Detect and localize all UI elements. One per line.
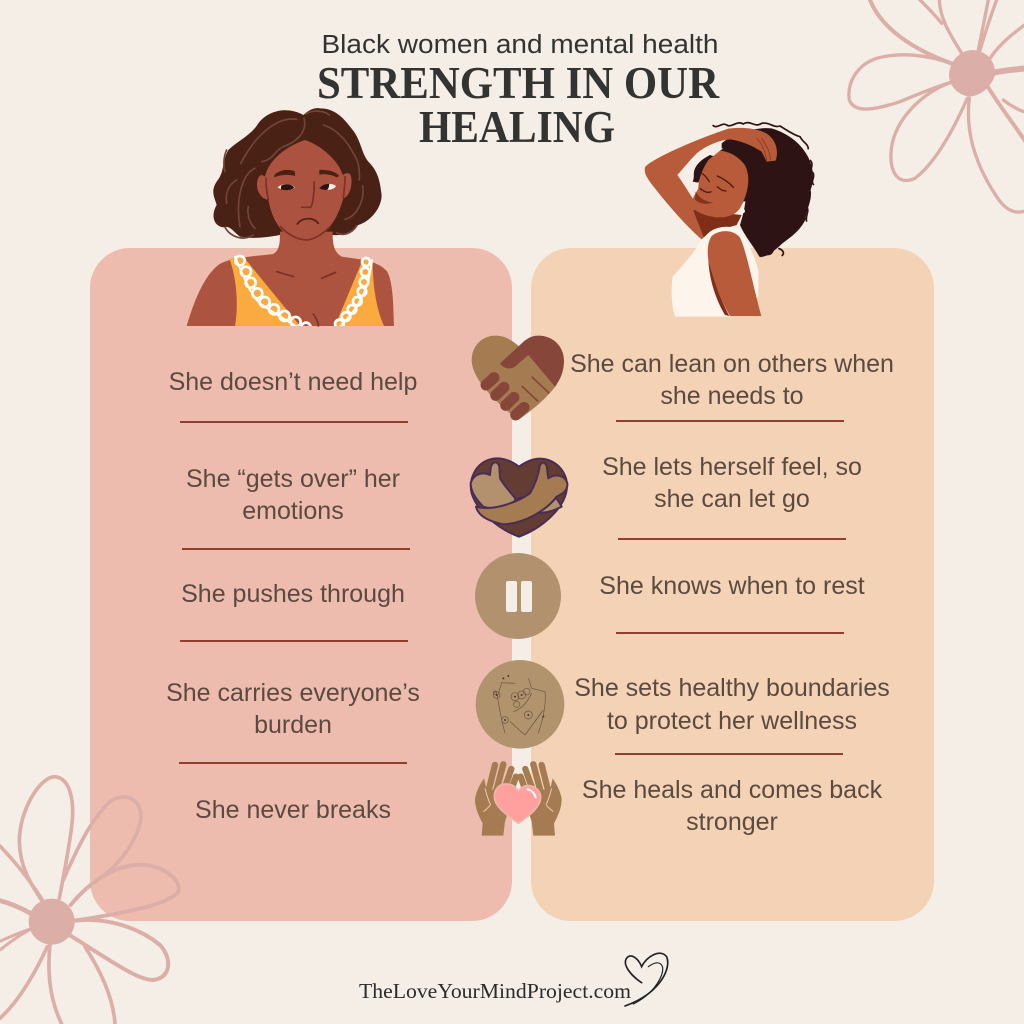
panel: myths (left) <box>90 248 512 921</box>
hair <box>213 108 382 238</box>
icon: boundaries line art circle <box>476 660 564 749</box>
heading: title <box>317 57 720 152</box>
icon: self-hug heart <box>471 458 567 537</box>
heading: title: HEALING <box>419 101 615 152</box>
icon: flower bottom left <box>0 777 179 1024</box>
features <box>266 177 345 326</box>
neck shadow <box>693 210 742 238</box>
left hand <box>475 764 516 836</box>
text block: truths: She knows when to rest <box>599 572 865 600</box>
text block: truths: She can lean on others when <box>570 350 894 378</box>
body <box>187 232 394 326</box>
text block: myths: She “gets over” her <box>186 465 400 493</box>
text block: truths: she needs to <box>660 382 804 410</box>
text block: myths: She never breaks <box>195 796 391 824</box>
right hand <box>521 764 562 836</box>
text block: myths: burden <box>254 711 332 739</box>
features <box>700 138 771 192</box>
icon: pause circle <box>475 553 561 639</box>
shoulder and arm <box>708 231 761 316</box>
heart <box>494 784 541 823</box>
text block: truths: She sets healthy boundaries <box>574 674 890 702</box>
text block: truths: to protect her wellness <box>607 707 857 735</box>
illustration: relaxed woman <box>645 123 814 317</box>
top <box>229 257 300 326</box>
text block: truths <box>570 350 894 836</box>
curly hair <box>722 128 813 257</box>
heading: subtitle: Black women and mental health <box>322 31 718 59</box>
text block: myths <box>166 368 420 824</box>
raised arm <box>645 128 777 239</box>
illustration: sad woman <box>187 108 394 332</box>
text block: truths: she can let go <box>654 485 810 513</box>
brows and eyes <box>274 170 295 177</box>
icon: footer heart <box>625 953 668 1006</box>
text block: myths: She pushes through <box>181 580 405 608</box>
text block: truths: She heals and comes back <box>582 776 883 804</box>
panel: truths (right) <box>531 248 934 921</box>
hair strands <box>224 111 363 238</box>
face <box>692 151 749 217</box>
icon: hands holding heart <box>475 764 562 836</box>
front hair on forehead <box>720 146 758 202</box>
text block: truths: She lets herself feel, so <box>602 453 862 481</box>
white dress <box>672 227 758 317</box>
side curls <box>693 155 715 183</box>
text block: truths: stronger <box>686 808 778 836</box>
icon: flower top right <box>849 0 1024 212</box>
text block: myths: emotions <box>242 497 344 525</box>
text block: myths: She doesn’t need help <box>169 368 417 396</box>
icon: handshake heart <box>472 336 564 420</box>
text block: myths: She carries everyone’s <box>166 679 420 707</box>
heading: title: STRENGTH IN OUR <box>317 57 720 108</box>
footer website: TheLoveYourMindProject.com <box>359 979 631 1003</box>
face <box>257 140 352 239</box>
lace <box>235 256 372 332</box>
